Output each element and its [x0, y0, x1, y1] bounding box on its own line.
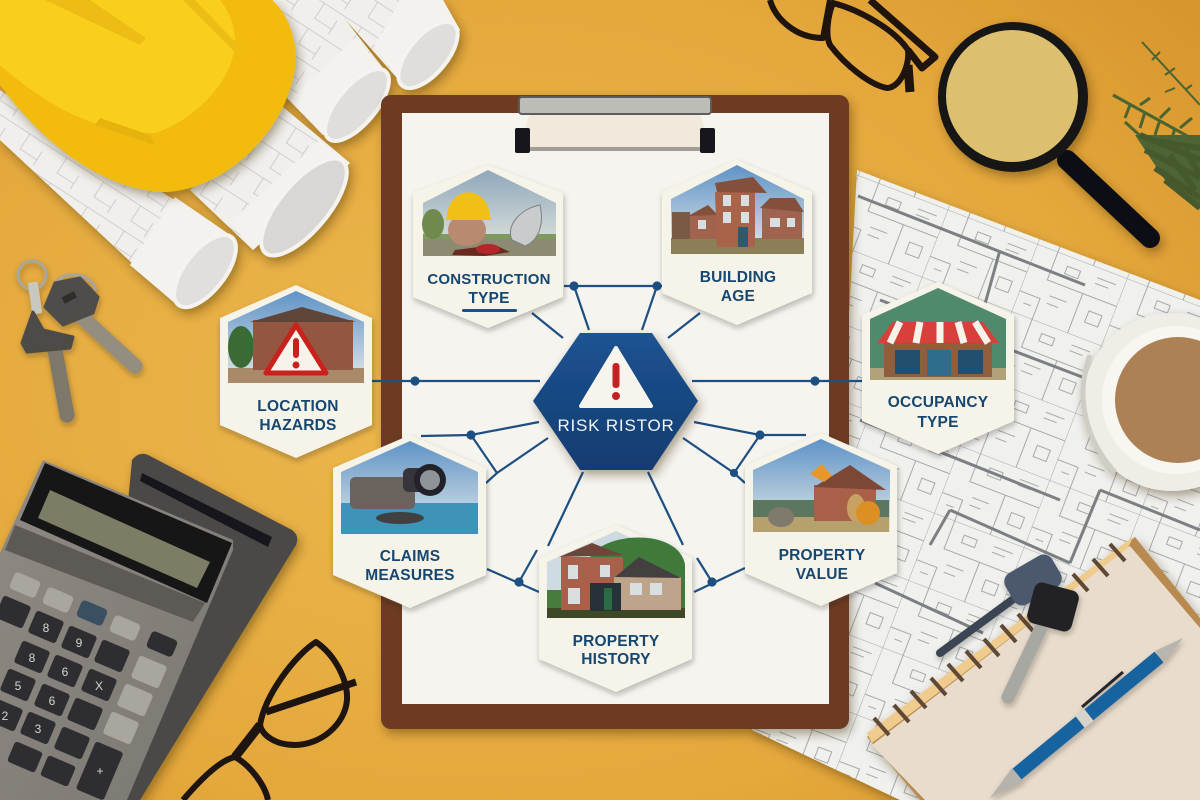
center label: RISK RISTOR [557, 416, 675, 435]
hexagon: property value [745, 433, 897, 606]
calculator backing [100, 454, 297, 800]
scene: shop [870, 288, 1006, 380]
calculator keys: 8 [43, 621, 50, 635]
blueprint sheet right [752, 170, 1200, 800]
icon: red warning [266, 325, 326, 373]
label: PROPERTY [573, 633, 660, 650]
scene: worker [422, 170, 556, 256]
spiral rings [874, 544, 1125, 735]
roll: lower right [190, 107, 361, 268]
calculator keys [0, 571, 178, 800]
clipboard clip [515, 97, 715, 153]
hexagon: claims measures [333, 435, 486, 608]
calculator body [0, 460, 233, 800]
icon: keys left [18, 261, 135, 415]
hexagon: occupancy type [862, 282, 1014, 454]
hexagon: property history: HISTORY [581, 651, 651, 668]
hexagon: location hazards: HAZARDS [259, 417, 337, 434]
hexagon: construction type [413, 165, 563, 328]
hexagon: occupancy type: TYPE [917, 414, 959, 431]
hexagon: property value: VALUE [796, 566, 848, 583]
hexagon: building age [662, 160, 812, 325]
calculator keys: 6 [62, 665, 69, 679]
icon: coffee cup [1083, 313, 1200, 491]
label: BUILDING [700, 269, 776, 286]
label: OCCUPANCY [888, 394, 989, 411]
calculator keys: X [95, 679, 103, 693]
calculator keys: + [96, 764, 104, 778]
scene: security camera [341, 441, 478, 534]
panel: clipboard [381, 95, 849, 729]
label: CONSTRUCTION [427, 271, 551, 288]
connector lines [372, 282, 862, 592]
hexagon: location hazards [220, 285, 372, 458]
roll: lower left [0, 90, 247, 317]
icon: calculator [0, 454, 297, 800]
hexagon: claims measures: MEASURES [365, 567, 455, 584]
scene: house with coins [753, 439, 890, 532]
blueprint rolls [0, 0, 468, 317]
roll: upper middle [250, 0, 400, 151]
central hexagon: risk factor [533, 333, 698, 470]
scene: brick house [671, 165, 804, 254]
calculator keys: 5 [15, 679, 22, 693]
hexagon: building age: AGE [721, 288, 755, 305]
icon: keys right [940, 551, 1081, 697]
label: LOCATION [257, 398, 339, 415]
roll: upper right [328, 0, 468, 98]
hexagon: construction type: TYPE [468, 290, 510, 307]
scene: hazard house [228, 291, 364, 383]
icon: magnifying glass [938, 22, 1150, 238]
scene: two houses [547, 531, 685, 618]
label: CLAIMS [380, 548, 440, 565]
calculator keys: 3 [35, 722, 42, 736]
icon: blue pen [990, 638, 1183, 798]
panel: notebook [867, 537, 1200, 800]
label: PROPERTY [779, 547, 866, 564]
plant sprig [1113, 42, 1200, 208]
icon: glasses bottom [183, 642, 356, 800]
calculator keys: 6 [49, 694, 56, 708]
icon: warning triangle [581, 348, 651, 406]
hexagon: property history [539, 525, 692, 692]
calculator keys: 9 [76, 636, 83, 650]
icon: hard hat [0, 0, 296, 192]
calculator keys: 8 [29, 651, 36, 665]
icon: glasses top [770, 0, 935, 92]
calculator keys: 2 [2, 709, 9, 723]
